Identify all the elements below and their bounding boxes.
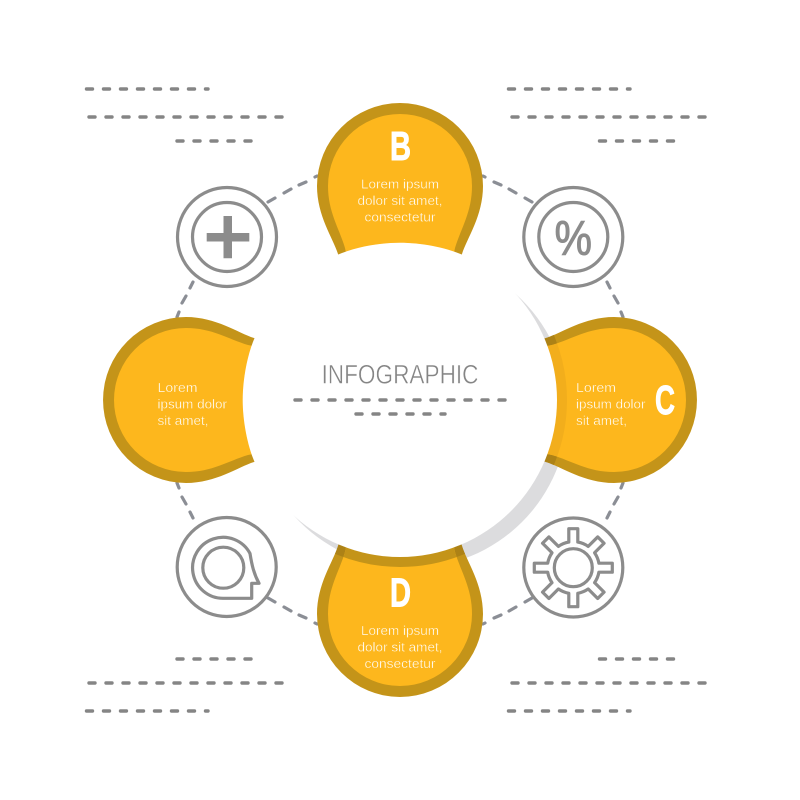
panel text: D: Lorem ipsum [361,623,439,638]
text placeholder: bottom left [86,659,283,711]
panel text: C [576,377,675,428]
panel text: C: sit amet, [576,413,627,428]
petal shape: C [544,317,697,483]
panel text: D [358,570,442,671]
text placeholder: top right [508,89,706,141]
icon: percent: % [555,211,592,265]
icon: gear [524,518,623,617]
panel text: D: D [390,570,411,616]
title: INFOGRAPHIC [322,360,478,390]
icon: head [177,518,276,616]
text placeholder: bottom right [508,659,706,711]
dashed connector ring [177,176,623,624]
panel text: B [358,123,442,224]
petal shape: D [317,544,483,697]
petal shape: left [103,317,260,483]
title dashes [295,400,505,414]
central circle shadow [254,254,568,568]
panel text: D: dolor sit amet, [358,640,442,654]
panel text: left: Lorem [158,380,198,395]
panel text: B: dolor sit amet, [358,193,442,208]
panel text: C: ipsum dolor [576,396,646,412]
central white circle [243,243,557,557]
icon: percent [524,188,623,286]
panel text: left: ipsum dolor [158,396,228,412]
panel text: D: consectetur [364,656,436,671]
panel text: C: C [655,377,675,423]
panel text: C: Lorem [576,380,616,395]
icon: plus [178,188,276,286]
panel text: left [158,380,228,428]
panel text: left: sit amet, [158,413,208,428]
panel text: B: Lorem ipsum [361,176,439,192]
text placeholder: top left [86,89,283,141]
panel text: B: B [390,123,411,169]
petal shape: B [317,103,483,260]
panel text: B: consectetur [364,210,436,224]
